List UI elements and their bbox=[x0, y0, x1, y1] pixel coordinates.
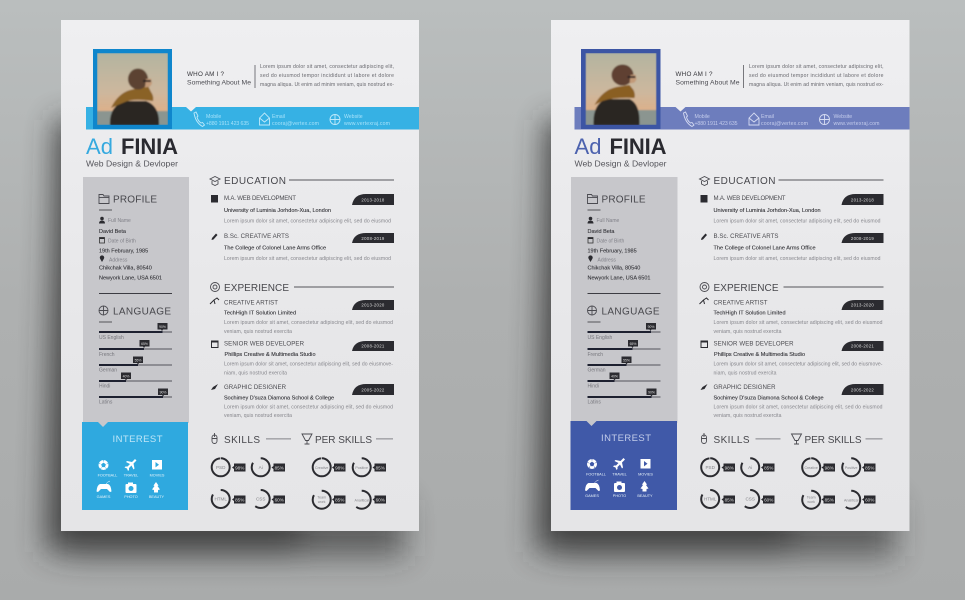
language bars: 55% bbox=[135, 358, 141, 362]
section: skills bbox=[701, 433, 882, 509]
about text: Lorem ipsum dolor sit amet, consectetur adipiscing elit, bbox=[260, 64, 394, 70]
photo: person facing a sunset bbox=[97, 53, 168, 125]
entry: web development bbox=[211, 194, 394, 224]
entry: web development: 2013-2018 bbox=[851, 197, 874, 202]
experience heading: EXPERIENCE bbox=[224, 283, 289, 294]
skill chart: PSD: 98% bbox=[235, 465, 244, 470]
entry: creative arts: Lorem ipsum dolor sit amet, consectetur adipiscing elit, sed do eiusmod bbox=[224, 256, 391, 262]
entry: web development: Lorem ipsum dolor sit amet, consectetur adipiscing elit, sed do eiusmod bbox=[714, 218, 881, 224]
skills heading: SKILLS bbox=[714, 435, 750, 446]
skill chart: creative: Creative bbox=[315, 466, 328, 470]
about me heading: Something About Me bbox=[676, 80, 740, 86]
language bars: 40% bbox=[611, 374, 618, 378]
profile details bbox=[588, 217, 650, 282]
icon: beauty: BEAUTY bbox=[637, 494, 653, 498]
entry: senior web developer: Phillips Creative & Multimedia Studio bbox=[714, 352, 805, 358]
language heading: LANGUAGE bbox=[602, 306, 660, 318]
skill chart: analitical bbox=[842, 491, 876, 509]
section: skills bbox=[212, 433, 393, 509]
skill chart: team work: 85% bbox=[335, 497, 344, 502]
experience heading bbox=[210, 282, 394, 294]
skill chart: PSD bbox=[701, 458, 735, 476]
skill chart: team work: 85% bbox=[825, 497, 834, 502]
per skills heading bbox=[302, 434, 393, 446]
icon: games: GAMES bbox=[585, 494, 599, 498]
contact band bbox=[86, 107, 419, 130]
entry: graphic designer: 2005-2022 bbox=[361, 388, 385, 392]
experience heading: EXPERIENCE bbox=[714, 283, 779, 294]
language bars: 90% bbox=[648, 390, 655, 394]
entry: senior web developer: niam, quis nostrud exercita bbox=[714, 370, 777, 376]
language bars: 90% bbox=[648, 325, 654, 329]
entry: senior web developer: SENIOR WEB DEVELOPER bbox=[224, 340, 305, 348]
skill chart: team work bbox=[313, 491, 346, 509]
panel: interest bbox=[570, 421, 677, 510]
entry: graphic designer bbox=[700, 384, 884, 419]
language bars: 65% bbox=[630, 342, 636, 346]
language bars: Latins bbox=[99, 400, 113, 406]
language bars: German bbox=[99, 368, 117, 374]
section: education bbox=[210, 176, 394, 262]
name: FINIA bbox=[121, 134, 178, 159]
about text: sed do eiusmod tempor incididunt ut labore et dolore bbox=[749, 73, 884, 79]
skill chart: CSS: 60% bbox=[275, 497, 284, 502]
about text: Lorem ipsum dolor sit amet, consectetur adipiscing elit, bbox=[749, 64, 884, 70]
entry: senior web developer: Lorem ipsum dolor sit amet, consectetur adipiscing elit, sed do eiusmove- bbox=[224, 362, 393, 368]
skill chart: positive bbox=[353, 458, 386, 476]
entry: senior web developer bbox=[700, 340, 884, 376]
profile details: David Beta bbox=[99, 229, 127, 235]
entry: web development: 2013-2018 bbox=[361, 197, 385, 202]
email contact: cooraj@vertex.com bbox=[272, 121, 319, 127]
entry: creative artist: CREATIVE ARTIST bbox=[224, 300, 278, 306]
skill chart: HTML bbox=[701, 490, 735, 508]
language bars: 90% bbox=[159, 325, 166, 329]
language bars bbox=[588, 323, 660, 406]
entry: creative artist: veniam, quis nostrud exercita bbox=[224, 329, 292, 335]
entry: graphic designer: GRAPHIC DESIGNER bbox=[714, 384, 776, 391]
language bars bbox=[99, 323, 172, 406]
entry: graphic designer bbox=[211, 384, 394, 419]
email contact: Email bbox=[761, 114, 774, 120]
name: FINIA bbox=[610, 134, 667, 159]
entry: creative arts: The College of Colonel Lane Arms Office bbox=[224, 246, 326, 252]
profile heading bbox=[99, 194, 157, 210]
profile details: Newyork Lane, USA 6501 bbox=[588, 276, 650, 282]
entry: creative arts: B.Sc. CREATIVE ARTS bbox=[224, 233, 289, 240]
website contact: Website bbox=[834, 114, 852, 120]
profile heading bbox=[588, 194, 646, 210]
entry: creative artist: 2013-2020 bbox=[851, 303, 874, 308]
language bars: 65% bbox=[141, 342, 148, 346]
entry: creative arts bbox=[701, 233, 884, 262]
about divider bbox=[743, 65, 744, 88]
mobile contact: +880 1911 423 635 bbox=[206, 121, 249, 127]
entry: senior web developer: 2008-2021 bbox=[851, 344, 874, 349]
mobile contact: +880 1911 423 635 bbox=[694, 121, 738, 127]
icon: movies: MOVIES bbox=[638, 472, 653, 476]
skill chart: positive: 85% bbox=[865, 465, 874, 470]
email contact: Email bbox=[272, 114, 285, 120]
skill chart: team work: Team bbox=[807, 496, 816, 500]
skill chart: AI: 85% bbox=[764, 465, 773, 470]
skill chart: AI: Ai bbox=[748, 465, 752, 470]
profile heading: PROFILE bbox=[602, 194, 646, 206]
website contact: Website bbox=[344, 114, 363, 120]
about me heading: Something About Me bbox=[187, 80, 251, 86]
skill chart: AI: Ai bbox=[259, 465, 263, 470]
skill chart: HTML: 85% bbox=[235, 497, 244, 502]
paper bbox=[61, 20, 419, 531]
panel: sidebar bbox=[83, 177, 189, 423]
icon: beauty: BEAUTY bbox=[149, 495, 165, 499]
profile details: Address bbox=[598, 258, 616, 264]
skill chart: creative bbox=[802, 458, 835, 476]
about divider bbox=[254, 65, 256, 88]
entry: web development: University of Luminia Jorhdon-Xua, London bbox=[224, 208, 331, 214]
skill chart: creative: Creative bbox=[805, 466, 818, 470]
language heading: LANGUAGE bbox=[113, 306, 171, 318]
skill chart: analitical bbox=[353, 491, 386, 509]
section: education bbox=[700, 176, 884, 262]
skill chart: HTML bbox=[212, 490, 246, 508]
language bars: 55% bbox=[623, 358, 630, 362]
skill chart: team work: work bbox=[807, 500, 815, 504]
entry: graphic designer: veniam, quis nostrud exercita bbox=[714, 413, 782, 419]
skill chart: PSD: PSD bbox=[705, 465, 716, 470]
website contact: www.vertexraj.com bbox=[834, 121, 880, 127]
section: experience bbox=[700, 282, 884, 419]
entry: creative arts: 2008-2019 bbox=[361, 236, 385, 241]
entry: graphic designer: GRAPHIC DESIGNER bbox=[224, 384, 287, 391]
about text: magna aliqua. Ut enim ad minim veniam, quis nostrud ex- bbox=[260, 82, 394, 88]
entry: graphic designer: Lorem ipsum dolor sit amet, consectetur adipiscing elit, sed do eiusmod bbox=[714, 404, 883, 410]
entry: web development: M.A. WEB DEVELOPMENT bbox=[224, 195, 296, 202]
entry: creative artist bbox=[700, 298, 884, 335]
entry: creative artist: Lorem ipsum dolor sit amet, consectetur adipiscing elit, sed do eiusmod bbox=[224, 320, 393, 326]
icon: phone bbox=[194, 112, 204, 126]
icon: photo: PHOTO bbox=[124, 495, 138, 499]
entry: graphic designer: Lorem ipsum dolor sit amet, consectetur adipiscing elit, sed do eiusmod bbox=[224, 404, 393, 410]
profile details: Chikchak Villa, 80540 bbox=[588, 266, 640, 272]
resume sheet: blue bbox=[61, 20, 419, 531]
skill chart: AI: 85% bbox=[275, 465, 284, 470]
about me heading: WHO AM I ? bbox=[676, 71, 713, 78]
icon: games: GAMES bbox=[97, 495, 111, 499]
entry: web development: University of Luminia Jorhdon-Xua, London bbox=[714, 208, 820, 214]
skills heading: SKILLS bbox=[224, 435, 260, 446]
photo frame bbox=[93, 49, 172, 129]
skill chart: positive bbox=[842, 458, 876, 476]
skill chart: PSD: 98% bbox=[725, 465, 734, 470]
per skills heading bbox=[792, 434, 882, 446]
profile details: Date of Birth bbox=[108, 238, 136, 244]
skill chart: analitical: 60% bbox=[865, 497, 874, 502]
icon: photo: PHOTO bbox=[613, 494, 626, 498]
profile details: Address bbox=[109, 258, 128, 264]
skill chart: team work bbox=[802, 491, 835, 509]
experience heading bbox=[700, 282, 884, 294]
about text: sed do eiusmod tempor incididunt ut labore et dolore bbox=[260, 73, 394, 79]
profile details: Full Name bbox=[596, 218, 620, 224]
education heading: EDUCATION bbox=[224, 176, 286, 187]
education heading bbox=[700, 176, 884, 187]
resume sheet: indigo bbox=[551, 20, 910, 531]
job title: Web Design & Devloper bbox=[574, 158, 667, 168]
entry: creative artist: 2013-2020 bbox=[361, 303, 385, 308]
photo frame bbox=[581, 49, 660, 129]
website contact: www.vertexraj.com bbox=[344, 121, 390, 127]
paper shadows bbox=[46, 120, 895, 556]
skill chart: HTML: HTML bbox=[214, 497, 227, 502]
profile details: David Beta bbox=[588, 229, 615, 235]
skill chart: AI bbox=[741, 458, 774, 476]
entry: senior web developer bbox=[211, 340, 394, 376]
skill chart: analitical: Analitical bbox=[355, 498, 369, 502]
profile heading: PROFILE bbox=[113, 194, 157, 206]
skill chart: positive: Positive bbox=[845, 466, 857, 470]
per skills heading: PER SKILLS bbox=[804, 435, 862, 446]
entry: creative artist: CREATIVE ARTIST bbox=[714, 300, 768, 306]
skill chart: HTML: 85% bbox=[725, 497, 734, 502]
skill chart: PSD: PSD bbox=[216, 465, 226, 470]
entry: creative arts: B.Sc. CREATIVE ARTS bbox=[714, 233, 778, 240]
about me heading: WHO AM I ? bbox=[187, 71, 224, 78]
entry: creative artist: TechHigh IT Solution Limited bbox=[714, 310, 786, 316]
profile details: Newyork Lane, USA 6501 bbox=[99, 276, 162, 282]
panel: interest bbox=[82, 422, 188, 510]
interest heading: INTEREST bbox=[112, 434, 163, 445]
panel: sidebar bbox=[571, 177, 678, 423]
icon: travel: TRAVEL bbox=[124, 474, 138, 478]
language bars: Latins bbox=[588, 400, 601, 406]
entry: creative arts: 2008-2019 bbox=[851, 236, 874, 241]
skill chart: CSS: CSS bbox=[745, 497, 755, 502]
entry: graphic designer: Sochimey D'suza Diamona School & College bbox=[714, 396, 824, 402]
entry: web development bbox=[700, 194, 884, 224]
entry: creative arts bbox=[212, 233, 394, 262]
language bars: Hindi bbox=[588, 384, 599, 390]
language bars: 90% bbox=[160, 390, 166, 394]
language bars: French bbox=[588, 352, 603, 358]
skill chart: analitical: 60% bbox=[376, 497, 385, 502]
icon: travel: TRAVEL bbox=[612, 472, 627, 476]
icon: globe bbox=[820, 114, 830, 124]
job title: Web Design & Devloper bbox=[86, 158, 178, 168]
profile details bbox=[99, 217, 162, 282]
skill chart: positive: 85% bbox=[376, 465, 385, 470]
profile details: Date of Birth bbox=[596, 238, 625, 244]
entry: senior web developer: Lorem ipsum dolor sit amet, consectetur adipiscing elit, sed do eiusmove- bbox=[714, 362, 883, 368]
entry: web development: Lorem ipsum dolor sit amet, consectetur adipiscing elit, sed do eiusmod bbox=[224, 218, 391, 224]
skill chart: creative: 98% bbox=[335, 465, 344, 470]
mobile contact: Mobile bbox=[206, 114, 221, 120]
skill chart: AI bbox=[252, 458, 285, 476]
entry: creative artist: TechHigh IT Solution Limited bbox=[224, 310, 296, 316]
language heading bbox=[588, 306, 660, 322]
skill chart: CSS: CSS bbox=[256, 497, 265, 502]
skill chart: team work: Team bbox=[317, 496, 326, 500]
entry: graphic designer: 2005-2022 bbox=[851, 388, 874, 392]
profile details: Full Name bbox=[108, 218, 131, 224]
entry: creative arts: Lorem ipsum dolor sit amet, consectetur adipiscing elit, sed do eiusmod bbox=[714, 256, 881, 262]
profile details: Chikchak Villa, 80540 bbox=[99, 266, 152, 272]
skill chart: analitical: Analitical bbox=[844, 498, 859, 502]
education heading: EDUCATION bbox=[714, 176, 776, 187]
icon: envelope bbox=[749, 113, 759, 125]
language bars: French bbox=[99, 352, 115, 358]
entry: senior web developer: Phillips Creative & Multimedia Studio bbox=[224, 352, 316, 358]
entry: graphic designer: veniam, quis nostrud exercita bbox=[224, 413, 292, 419]
skill chart: team work: work bbox=[318, 500, 326, 504]
photo: person facing a sunset bbox=[586, 53, 656, 125]
entry: senior web developer: niam, quis nostrud exercita bbox=[224, 370, 287, 376]
entry: creative arts: The College of Colonel Lane Arms Office bbox=[714, 246, 816, 252]
per skills heading: PER SKILLS bbox=[315, 435, 372, 446]
skill chart: CSS bbox=[252, 490, 285, 508]
skill chart: PSD bbox=[212, 458, 246, 476]
skill chart: creative: 98% bbox=[825, 465, 834, 470]
language bars: US English bbox=[99, 335, 124, 341]
language bars: 40% bbox=[123, 374, 129, 378]
icon: globe bbox=[330, 114, 340, 124]
entry: creative artist: Lorem ipsum dolor sit amet, consectetur adipiscing elit, sed do eiusmod bbox=[714, 320, 883, 326]
skill chart: CSS: 60% bbox=[764, 497, 773, 502]
skill chart: creative bbox=[313, 458, 346, 476]
entry: senior web developer: 2008-2021 bbox=[361, 344, 385, 349]
skill chart: CSS bbox=[741, 490, 774, 508]
skills heading bbox=[702, 433, 780, 446]
entry: graphic designer: Sochimey D'suza Diamona School & College bbox=[224, 396, 334, 402]
language bars: Hindi bbox=[99, 384, 110, 390]
name: Ad bbox=[86, 134, 113, 159]
email contact: cooraj@vertex.com bbox=[761, 121, 808, 127]
profile details: 19th February, 1985 bbox=[588, 248, 637, 254]
language heading bbox=[99, 306, 171, 322]
skills heading bbox=[212, 433, 291, 446]
skill chart: HTML: HTML bbox=[704, 497, 717, 502]
icon: phone bbox=[684, 112, 694, 126]
name: Ad bbox=[574, 134, 602, 159]
language bars: German bbox=[588, 368, 606, 374]
contact band bbox=[574, 107, 910, 130]
entry: creative artist: veniam, quis nostrud exercita bbox=[714, 329, 782, 335]
icon: movies: MOVIES bbox=[150, 474, 165, 478]
mobile contact: Mobile bbox=[694, 114, 710, 120]
entry: creative artist bbox=[210, 298, 394, 335]
entry: web development: M.A. WEB DEVELOPMENT bbox=[714, 195, 786, 202]
language bars: US English bbox=[588, 335, 612, 341]
icon: envelope bbox=[260, 113, 270, 125]
paper bbox=[551, 20, 910, 531]
section: experience bbox=[210, 282, 394, 419]
skill chart: positive: Positive bbox=[355, 466, 368, 470]
icon: football: FOOTBALL bbox=[586, 472, 606, 476]
about text: magna aliqua. Ut enim ad minim veniam, quis nostrud ex- bbox=[749, 82, 884, 88]
entry: senior web developer: SENIOR WEB DEVELOPER bbox=[714, 340, 794, 348]
icon: football: FOOTBALL bbox=[98, 474, 117, 478]
profile details: 19th February, 1985 bbox=[99, 248, 148, 254]
interest heading: INTEREST bbox=[601, 433, 651, 444]
education heading bbox=[210, 176, 394, 187]
